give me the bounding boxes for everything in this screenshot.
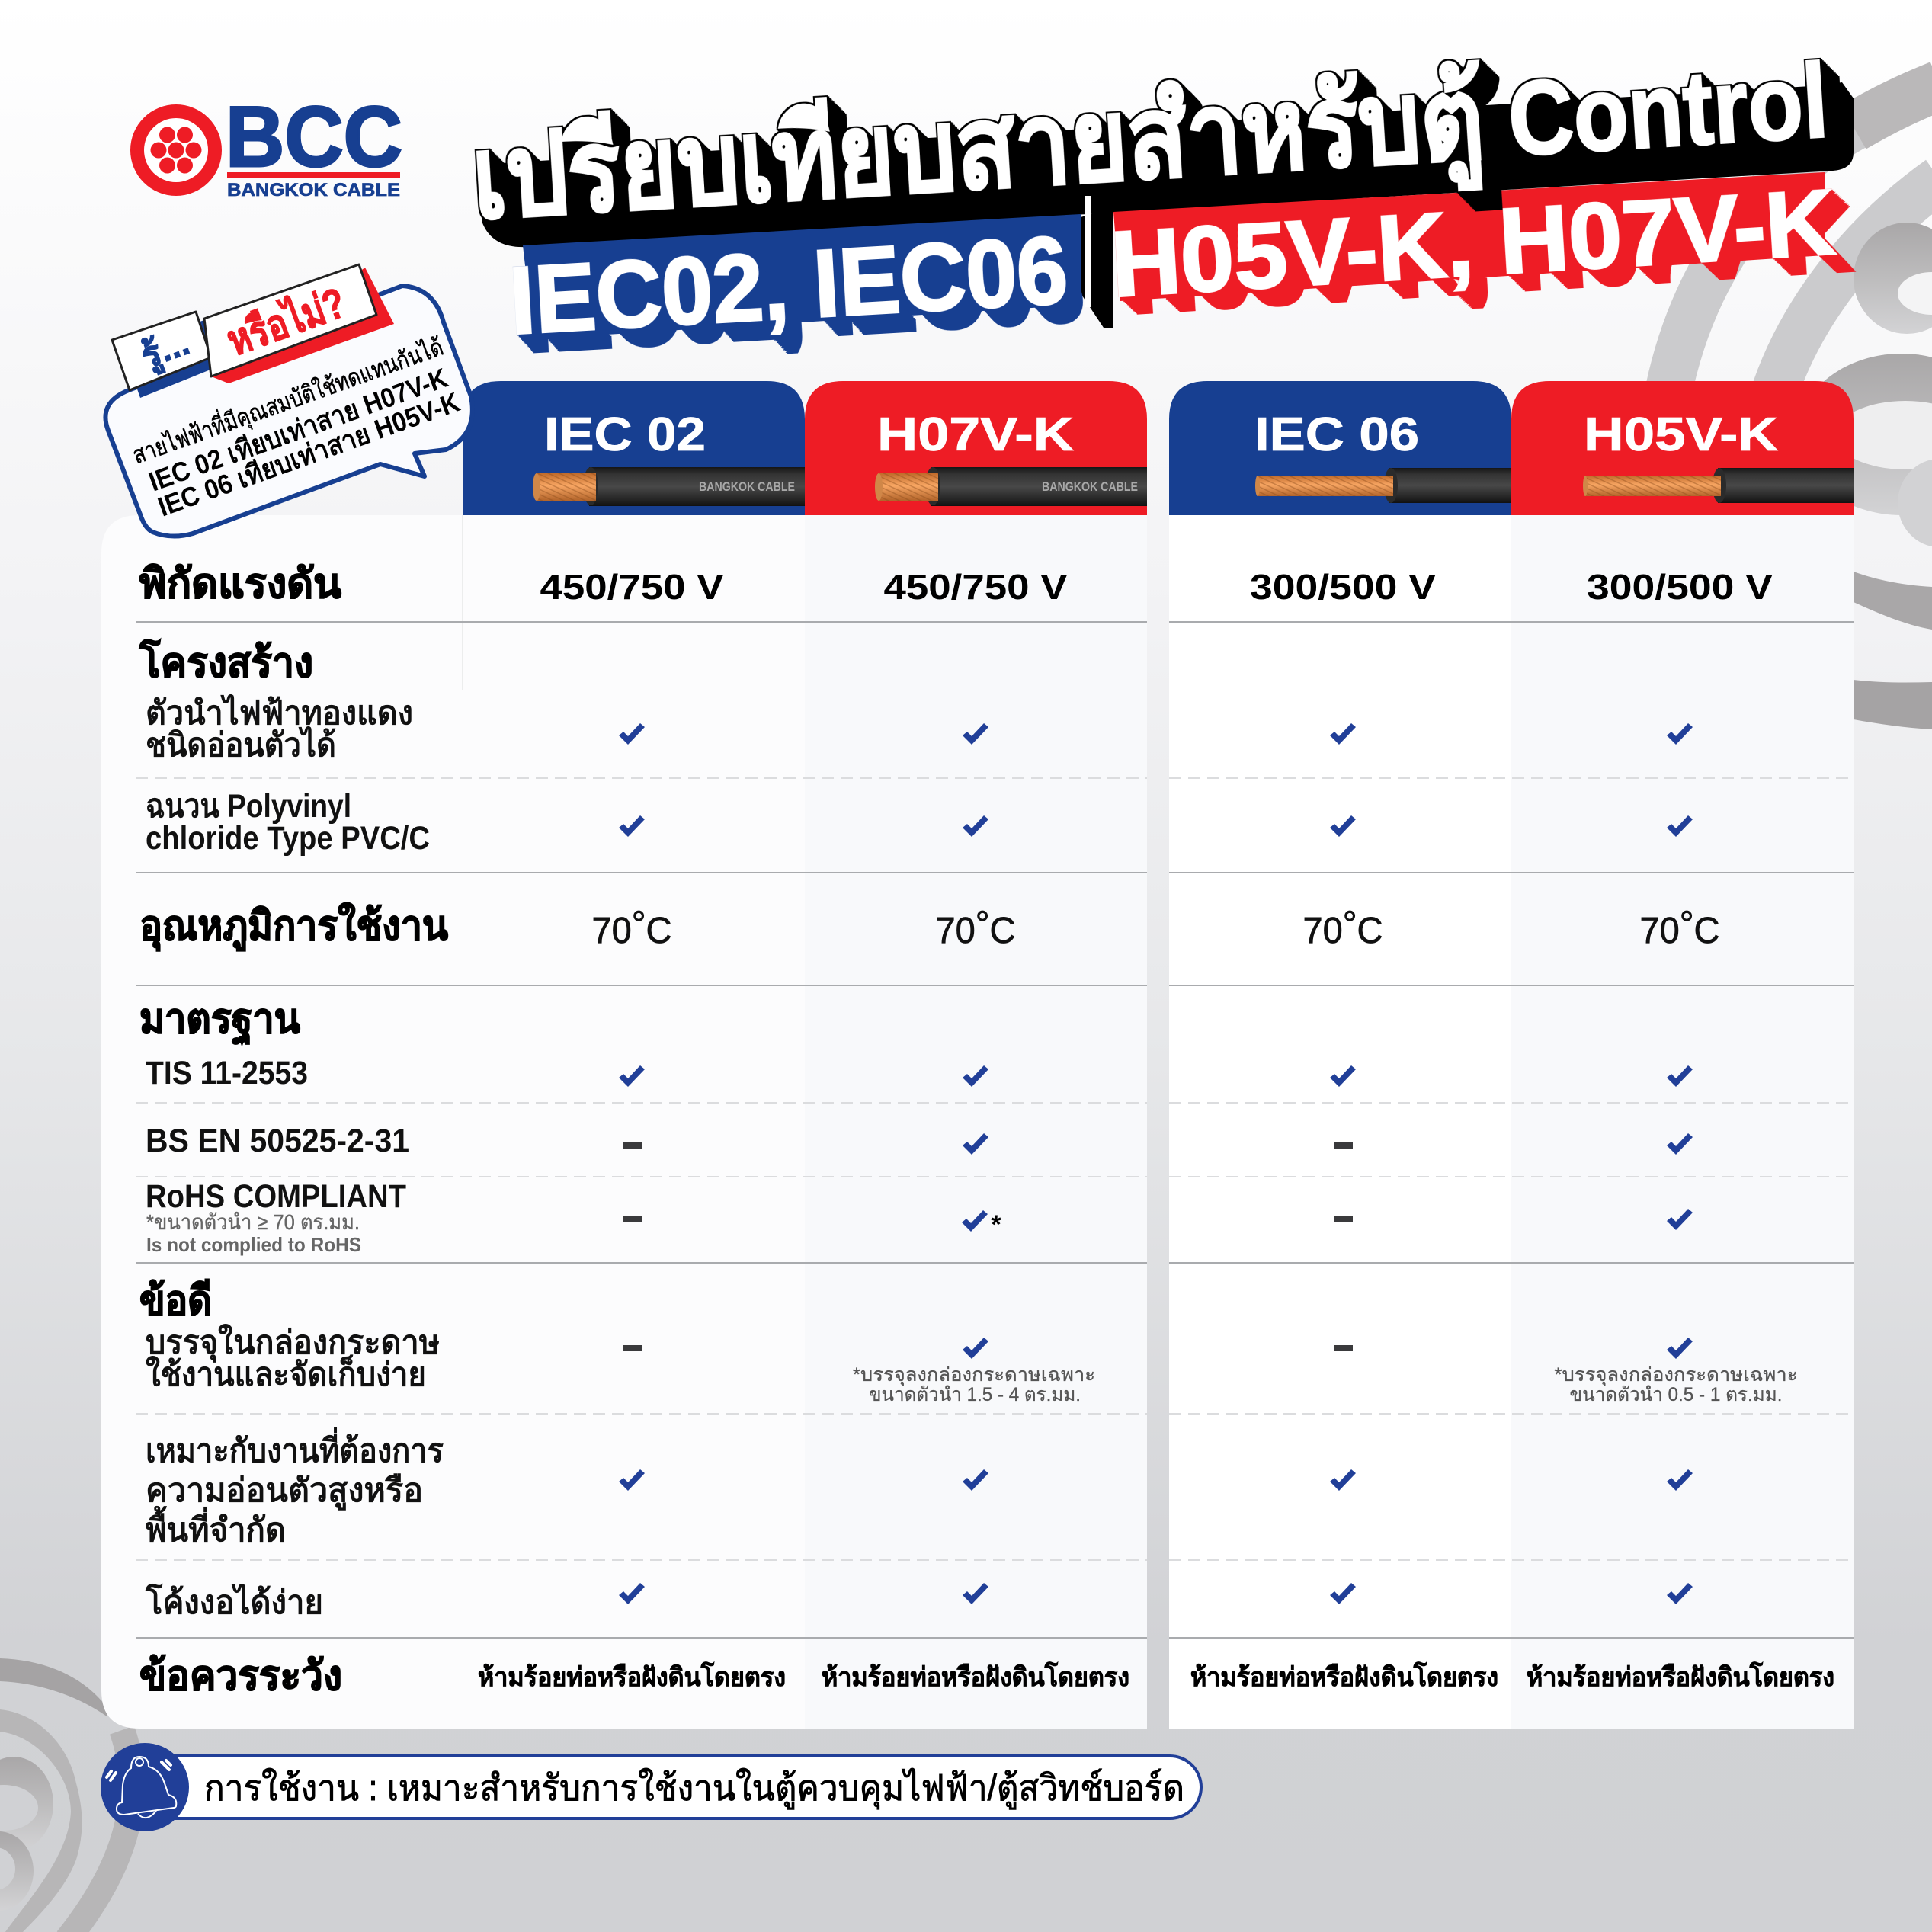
row: standards heading: มาตรฐาน — [139, 996, 300, 1046]
column header: H05V-K — [1511, 381, 1854, 515]
banner: หรือไม่?: หรือไม่? — [220, 277, 351, 365]
row: suited for flexibility: เหมาะกับงานที่ต้องการ — [146, 1427, 444, 1469]
column header: IEC 06: IEC 06 — [1254, 409, 1419, 461]
row: cautions: ห้ามร้อยท่อหรือฝังดินโดยตรง — [822, 1661, 1129, 1692]
row: packed in box: ขนาดตัวนำ 1.5 - 4 ตร.มม. — [869, 1384, 1081, 1405]
callout text line 2: IEC 02 เทียบเท่าสาย H07V-K — [145, 362, 452, 498]
row: cautions: ห้ามร้อยท่อหรือฝังดินโดยตรง — [1190, 1661, 1498, 1692]
row: operating temperature: อุณหภูมิการใช้งาน — [139, 902, 448, 952]
row: cautions: ห้ามร้อยท่อหรือฝังดินโดยตรง — [1527, 1661, 1834, 1692]
cable image: BANGKOK CABLE — [1042, 479, 1138, 494]
row: packed in box: บรรจุในกล่องกระดาษ — [146, 1323, 440, 1363]
row: operating temperature: C — [646, 911, 672, 951]
row: operating temperature: ° — [976, 905, 990, 945]
column header: H07V-K: H07V-K — [877, 409, 1074, 461]
row: easy to bend — [145, 1582, 1693, 1621]
row: packed in box — [146, 1323, 1797, 1405]
row: copper conductor: ชนิดอ่อนตัวได้ — [146, 726, 336, 764]
row: operating temperature: ° — [1680, 905, 1694, 945]
row: operating temperature: C — [1357, 911, 1383, 951]
row: packed in box: *บรรจุลงกล่องกระดาษเฉพาะ — [853, 1364, 1095, 1386]
row: voltage rating: พิกัดแรงดัน — [139, 561, 341, 607]
row: TIS 11-2553 — [146, 1055, 1693, 1091]
logo mark — [130, 104, 222, 196]
row: BS EN 50525-2-31: BS EN 50525-2-31 — [146, 1123, 409, 1159]
usage note pill — [130, 1756, 1201, 1818]
row: operating temperature: C — [990, 911, 1015, 951]
row: packed in box: ใช้งานและจัดเก็บง่าย — [146, 1354, 426, 1393]
row: insulation: ฉนวน Polyvinyl — [146, 788, 351, 825]
column header: IEC 02: IEC 02 — [544, 409, 706, 461]
banner: รู้... — [112, 312, 222, 398]
row: easy to bend: โค้งงอได้ง่าย — [145, 1582, 323, 1621]
row: voltage rating — [139, 561, 1773, 607]
row: suited for flexibility — [146, 1427, 1693, 1549]
title band: red — [1113, 172, 1825, 301]
row: structure heading: โครงสร้าง — [139, 639, 313, 686]
cable image: BANGKOK CABLE — [699, 479, 795, 494]
row: voltage rating: 450/750 V — [540, 567, 724, 607]
column header: H05V-K: H05V-K — [1584, 409, 1778, 461]
row: cautions: ข้อควรระวัง — [139, 1653, 342, 1699]
row: voltage rating: 450/750 V — [884, 567, 1068, 607]
row: operating temperature: 70 — [1640, 911, 1680, 951]
banner: รู้...: รู้... — [136, 322, 195, 378]
row: cautions — [139, 1653, 1834, 1699]
row: suited for flexibility: ความอ่อนตัวสูงหรือ — [146, 1472, 423, 1511]
cable image — [875, 467, 1147, 506]
title line 2: H05V-K, H07V-K: H05V-K, H07V-K — [1108, 170, 1837, 316]
title band: blue — [523, 214, 1081, 339]
row: operating temperature: 70 — [1303, 911, 1344, 951]
row: voltage rating: 300/500 V — [1587, 567, 1773, 607]
callout: did you know — [105, 264, 473, 537]
row: RoHS: * — [991, 1210, 1001, 1239]
row: copper conductor — [146, 694, 1693, 764]
row: operating temperature — [139, 902, 1719, 952]
row: packed in box: *บรรจุลงกล่องกระดาษเฉพาะ — [1555, 1364, 1797, 1386]
banner: หรือไม่? — [204, 264, 394, 383]
background ribbons: upper right — [1669, 85, 1932, 729]
row: TIS 11-2553: TIS 11-2553 — [146, 1055, 308, 1091]
row: operating temperature: C — [1694, 911, 1719, 951]
title line 2: IEC02, IEC06: IEC02, IEC06 — [507, 217, 1070, 354]
row: copper conductor: ตัวนำไฟฟ้าทองแดง — [146, 694, 413, 732]
row: RoHS — [146, 1178, 1693, 1256]
row: RoHS: *ขนาดตัวนำ ≥ 70 ตร.มม. — [146, 1210, 360, 1234]
table panel left — [101, 515, 1147, 1729]
callout text line 3: IEC 06 เทียบเท่าสาย H05V-K — [154, 386, 463, 523]
column header: IEC 02 — [463, 381, 805, 515]
title divider — [1081, 196, 1113, 328]
column header: IEC 06 — [1169, 381, 1511, 515]
row: advantages heading: ข้อดี — [139, 1278, 212, 1324]
row: voltage rating: 300/500 V — [1250, 567, 1436, 607]
row: operating temperature: ° — [632, 905, 646, 945]
usage note pill: การใช้งาน : เหมาะสำหรับการใช้งานในตู้ควบคุมไฟฟ้า/ตู้สวิทช์บอร์ด — [204, 1767, 1184, 1810]
row: cautions: ห้ามร้อยท่อหรือฝังดินโดยตรง — [478, 1661, 786, 1692]
row: packed in box: ขนาดตัวนำ 0.5 - 1 ตร.มม. — [1570, 1384, 1782, 1405]
logo: BCC Bangkok Cable — [130, 89, 402, 200]
background ribbons: lower left — [0, 1658, 132, 1932]
row: suited for flexibility: พื้นที่จำกัด — [146, 1505, 286, 1549]
row: operating temperature: 70 — [936, 911, 976, 951]
cable image — [1583, 468, 1854, 503]
column header: H07V-K — [805, 381, 1147, 515]
table panel right — [1169, 515, 1854, 1729]
row: operating temperature: ° — [1343, 905, 1357, 945]
row: RoHS: RoHS COMPLIANT — [146, 1178, 406, 1215]
logo wordmark: BCC — [226, 89, 402, 184]
row: insulation: chloride Type PVC/C — [146, 820, 430, 857]
row: RoHS: Is not complied to RoHS — [146, 1233, 361, 1256]
title line 1: เปรียบเทียบสายสำหรับตู้ Control — [469, 33, 1831, 250]
row: operating temperature: 70 — [591, 911, 633, 951]
cable image — [1255, 468, 1511, 503]
row: insulation — [146, 788, 1693, 857]
speech bubble — [105, 286, 473, 537]
icon: bell — [101, 1743, 189, 1831]
logo tagline: BANGKOK CABLE — [227, 180, 400, 200]
callout text line 1: สายไฟฟ้าที่มีคุณสมบัติใช้ทดแทนกันได้ — [128, 330, 447, 470]
cable image — [533, 467, 805, 506]
row: BS EN 50525-2-31 — [146, 1123, 1693, 1159]
title band: black — [482, 82, 1854, 247]
